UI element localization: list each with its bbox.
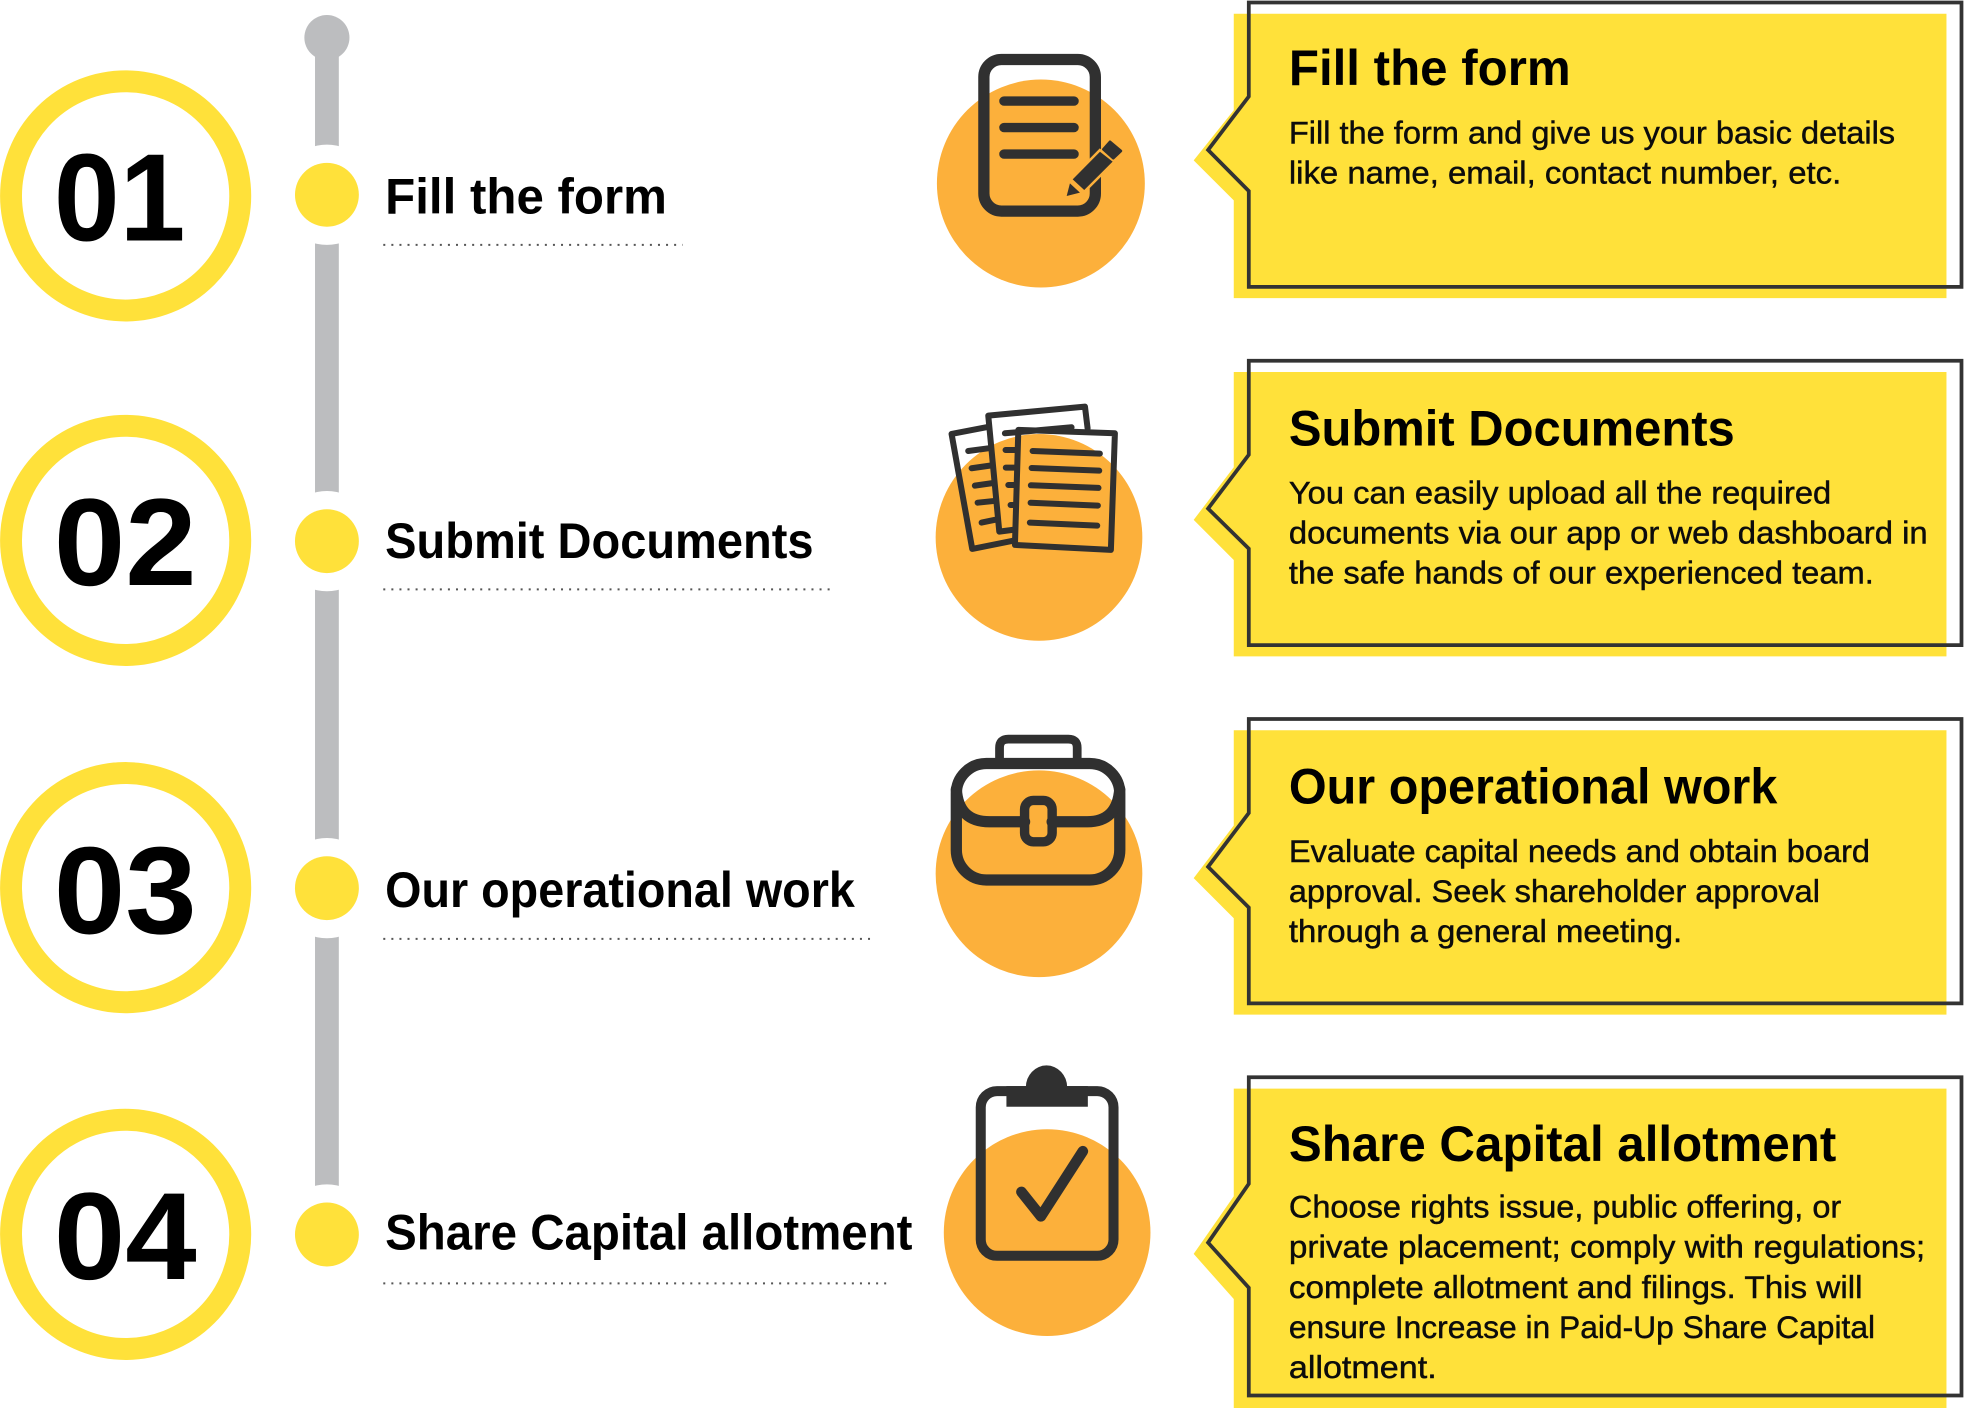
icon: clipboard with check [944, 1065, 1150, 1336]
panel text: private placement; comply with regulations; [1289, 1230, 1925, 1265]
panel text [1289, 476, 1928, 591]
number badge 04 [11, 1120, 240, 1349]
number badge 03 [11, 773, 240, 1002]
step 03 [11, 773, 872, 1002]
panel: Fill the form [1194, 3, 1961, 298]
panel text: ensure Increase in Paid-Up Share Capital [1289, 1310, 1875, 1345]
timeline node 04 [277, 1184, 377, 1285]
panel heading: Share Capital allotment [1289, 1116, 1837, 1172]
timeline line [304, 15, 349, 1234]
panel text: like name, email, contact number, etc. [1289, 156, 1841, 191]
icon: stack of documents [936, 407, 1142, 641]
panel heading: Our operational work [1289, 759, 1777, 815]
panel text [1289, 115, 1895, 191]
panel text: documents via our app or web dashboard in [1289, 516, 1928, 551]
timeline node 02 [277, 491, 377, 591]
panel heading: Submit Documents [1289, 400, 1735, 456]
step 04 [11, 1120, 913, 1349]
timeline node 01 [277, 145, 377, 245]
step 02 [11, 426, 832, 655]
panel text [1289, 834, 1870, 949]
panel text: allotment. [1289, 1350, 1437, 1385]
panel text: Choose rights issue, public offering, or [1289, 1190, 1841, 1225]
timeline node 03 [277, 838, 377, 938]
step label 02: Submit Documents [385, 513, 814, 569]
icon: briefcase [936, 739, 1142, 977]
icon: form with pencil [937, 60, 1145, 287]
step label 03: Our operational work [385, 862, 855, 918]
panel text [1289, 1190, 1925, 1385]
panel text: through a general meeting. [1289, 914, 1682, 949]
panel text: approval. Seek shareholder approval [1289, 874, 1820, 909]
panel text: You can easily upload all the required [1289, 476, 1831, 511]
panel: Share Capital allotment [1194, 1077, 1961, 1408]
number badge 03: 03 [54, 822, 197, 960]
number badge 01: 01 [54, 130, 185, 268]
panel text: Fill the form and give us your basic details [1289, 115, 1895, 150]
number badge 02: 02 [54, 474, 197, 612]
number badge 04: 04 [54, 1168, 197, 1306]
step label 01: Fill the form [385, 169, 667, 225]
step label 04: Share Capital allotment [385, 1205, 913, 1261]
panel heading: Fill the form [1289, 40, 1571, 96]
panel text: Evaluate capital needs and obtain board [1289, 834, 1870, 869]
panel: Our operational work [1194, 719, 1961, 1015]
number badge 02 [11, 426, 240, 655]
number badge 01 [11, 81, 240, 311]
panel text: the safe hands of our experienced team. [1289, 556, 1874, 591]
panel: Submit Documents [1194, 361, 1961, 656]
panel text: complete allotment and filings. This will [1289, 1270, 1863, 1305]
step 01 [11, 81, 683, 311]
